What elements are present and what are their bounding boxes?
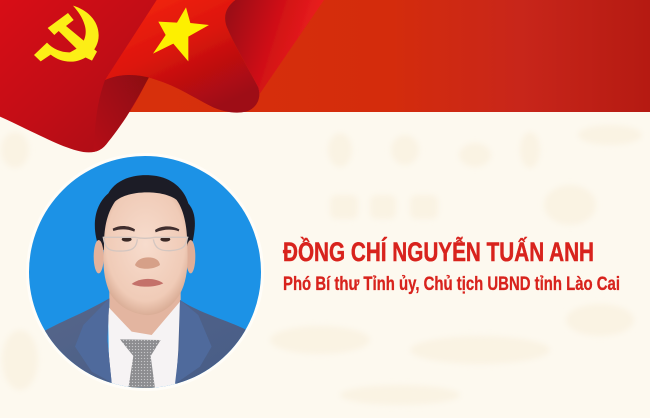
shirt <box>108 302 181 393</box>
party flag shadow fold <box>93 75 149 152</box>
icon: yellow star <box>153 7 209 61</box>
eyebrows <box>113 226 179 232</box>
vietnam flag rear fold <box>225 0 324 93</box>
red banner <box>0 0 650 112</box>
nose <box>135 257 160 269</box>
face <box>103 192 188 315</box>
faint drum pattern background <box>1 125 642 405</box>
icon: hammer and sickle <box>34 6 99 62</box>
tie <box>120 339 161 388</box>
hair <box>95 175 195 250</box>
vietnam flag panel <box>105 0 259 113</box>
blue backdrop <box>29 156 261 388</box>
flags <box>0 0 324 152</box>
party flag panel <box>0 0 160 152</box>
mouth <box>132 279 163 287</box>
suit <box>45 298 246 384</box>
neck <box>109 291 181 335</box>
person <box>40 175 253 397</box>
lapels <box>75 298 212 384</box>
glasses <box>103 237 188 251</box>
ears <box>94 240 104 273</box>
white ring <box>26 153 264 391</box>
portrait photo <box>26 153 264 397</box>
eyes <box>122 237 132 242</box>
